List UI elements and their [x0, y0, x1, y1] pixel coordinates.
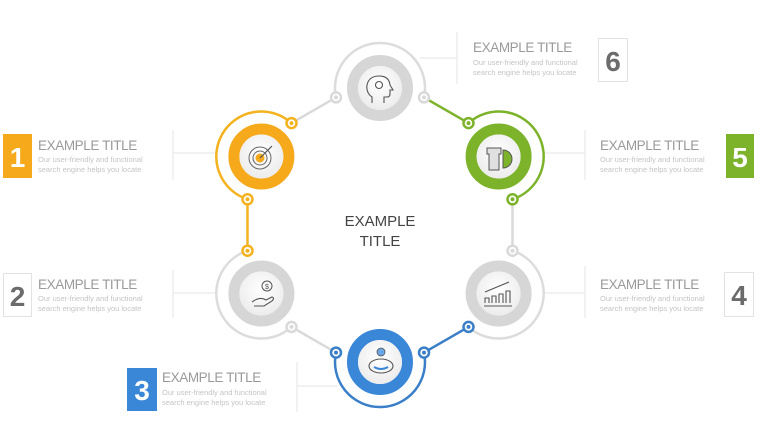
node 2: hand with coin icon (gray): $ — [265, 284, 269, 291]
item 6: Our user-friendly and functional — [473, 58, 578, 67]
node 4: growth chart icon (gray) — [464, 246, 544, 339]
item 5: search engine helps you locate — [600, 165, 703, 174]
item 3: search engine helps you locate — [162, 398, 265, 407]
node 6: head icon (gray) — [331, 43, 429, 116]
item 6: EXAMPLE TITLE — [473, 40, 572, 55]
item 2 — [4, 274, 143, 316]
node 3: piggy bank icon (blue) — [331, 334, 429, 407]
center title: TITLE — [360, 233, 400, 250]
item 1: 1 — [10, 142, 25, 173]
item 1: EXAMPLE TITLE — [38, 138, 137, 153]
item 2: EXAMPLE TITLE — [38, 277, 137, 292]
item 6 — [473, 38, 628, 82]
item 4 — [600, 272, 754, 316]
item 5: 5 — [732, 142, 748, 173]
item 6: search engine helps you locate — [473, 68, 576, 77]
center title: EXAMPLE — [345, 213, 415, 230]
item 1: Our user-friendly and functional — [38, 155, 143, 164]
item 4: Our user-friendly and functional — [600, 294, 705, 303]
item 4: search engine helps you locate — [600, 304, 703, 313]
item 3: EXAMPLE TITLE — [162, 370, 261, 385]
node 1: target icon (orange) — [216, 111, 296, 204]
item 3 — [127, 368, 267, 411]
item 2: 2 — [10, 281, 25, 312]
item 3: Our user-friendly and functional — [162, 388, 267, 397]
item 4: 4 — [731, 280, 747, 311]
item 1 — [3, 134, 143, 178]
item 1: search engine helps you locate — [38, 165, 141, 174]
item 4: EXAMPLE TITLE — [600, 277, 699, 292]
item 6: 6 — [605, 46, 621, 77]
item 5: Our user-friendly and functional — [600, 155, 705, 164]
center title — [345, 213, 415, 250]
item 3: 3 — [134, 375, 150, 406]
leader lines — [173, 32, 585, 412]
item 2: search engine helps you locate — [38, 304, 141, 313]
item 2: Our user-friendly and functional — [38, 294, 143, 303]
node 2: hand with coin icon (gray) — [216, 246, 296, 339]
item 5: EXAMPLE TITLE — [600, 138, 699, 153]
item 5 — [600, 134, 754, 178]
connector lines — [248, 97, 512, 353]
node 5: chess/chart icon (green) — [464, 111, 544, 204]
